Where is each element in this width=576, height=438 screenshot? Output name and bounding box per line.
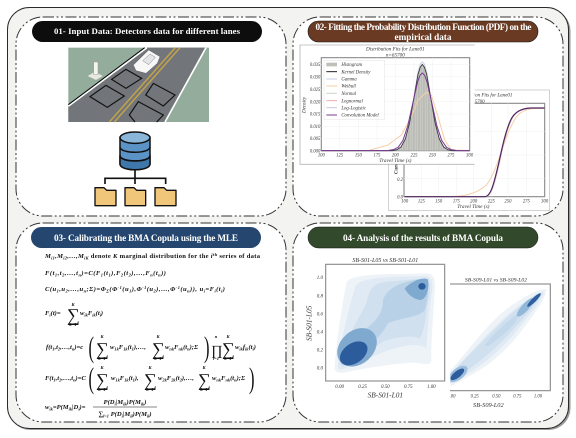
heading: input data (32, 21, 262, 42)
formula: joint distribution: F(t (45, 270, 54, 277)
formula: joint density: i=1 (213, 356, 219, 361)
formula: joint density: ,…,t (59, 344, 72, 351)
formula: joint CDF: ∑ (96, 370, 109, 390)
formula: joint distribution: ,t (57, 270, 62, 277)
formula: joint density: K (225, 334, 230, 339)
formula: joint distribution: (t (103, 270, 108, 277)
icon: folder 1 (95, 188, 116, 206)
formula: joint density: ∑ (222, 339, 235, 359)
heading: PDF fitting: 02- Fitting the Probability Distribution Function (PDF) on the (316, 22, 532, 32)
chart: cumulative distribution fits: Cumulative (394, 149, 399, 174)
formula: joint density: ),…, (133, 344, 146, 351)
formula: joint density: 2 (57, 346, 61, 352)
heading: BMA copula calibration (31, 227, 261, 248)
formula: gaussian copula: (t (216, 286, 221, 293)
formula: joint density: ∑ (96, 339, 109, 359)
icon: roadside sensor post (88, 62, 103, 80)
chart: density SB-S01-L05 vs SB-S01-L01: SB-S01-L05 vs SB-S01-L01 (352, 258, 418, 264)
chart: density SB-S01-L05 vs SB-S01-L01: 0.25 (358, 385, 368, 390)
chart: cumulative distribution fits: tion Fits for Lane01 (472, 93, 512, 98)
formula: joint distribution: n (150, 272, 153, 278)
formula: gaussian copula: i (214, 288, 216, 294)
chart: density distribution fits: 275 (448, 154, 455, 159)
icon: folder 3 (155, 188, 176, 206)
formula: marginal definition: iK (84, 256, 90, 260)
heading: copula results (308, 227, 538, 248)
chart: density distribution fits: n=65700 (386, 53, 405, 59)
formula: joint CDF: nk (216, 378, 222, 382)
formula: joint density: (t (183, 344, 187, 351)
chart: density SB-S01-L05 vs SB-S01-L01: SB-S01-L01 (368, 391, 403, 400)
histogram (397, 64, 448, 151)
heading: PDF fitting: empirical data (395, 32, 452, 42)
chart: density distribution fits: 0.010 (310, 125, 321, 130)
chart: density SB-S09-L01 vs SB-S09-L02: 0.25 (471, 394, 479, 399)
chart: density distribution fits: 0.020 (310, 100, 321, 105)
formula: joint distribution: 1 (101, 272, 103, 278)
chart: density SB-S01-L05 vs SB-S01-L01: 0.50 (381, 385, 390, 390)
chart: density SB-S09-L01 vs SB-S09-L02: SB-S09-L02 (473, 402, 504, 409)
formula: BMA marginal: ∑ (67, 305, 80, 325)
chart: cumulative distribution fits: 275 (523, 199, 530, 204)
formula: joint CDF: K (201, 365, 206, 370)
formula: BMA weights: ik (69, 406, 73, 412)
formula: joint density: n (215, 334, 218, 339)
formula: joint density: F (119, 344, 124, 351)
formula: joint CDF: n (73, 378, 76, 382)
legend (324, 60, 385, 119)
formula: joint density: )=c (73, 344, 83, 351)
formula: BMA weights: l=1 (103, 414, 109, 418)
chart: density distribution fits: Travel Time (s) (379, 157, 412, 164)
formula: BMA weights: il (147, 414, 150, 418)
chart: cumulative distribution fits: 100 (401, 199, 409, 204)
formula: joint density: ik (239, 346, 244, 352)
chart: cumulative distribution fits: 0.2 (397, 178, 404, 183)
chart: cumulative distribution fits: 150 (435, 199, 443, 204)
chart: density SB-S09-L01 vs SB-S09-L02: 0.00 (447, 394, 456, 399)
chart: cumulative distribution fits: 5700 (475, 100, 485, 105)
heading: copula results: 04- Analysis of the results of BMA Copula (343, 233, 503, 243)
formula: joint density: f(t (46, 344, 52, 351)
chart: density SB-S09-L01 vs SB-S09-L02: 0.75 (513, 394, 522, 399)
formula: BMA marginal: F (88, 310, 93, 317)
formula: marginal definition: K marginal distribution for the i (113, 253, 213, 260)
icon: car (133, 50, 160, 73)
fitted curves (321, 62, 470, 151)
formula: joint CDF: 2 (58, 378, 62, 382)
legend: Log-Logistic (340, 106, 367, 111)
formula: joint CDF: nk (225, 378, 231, 382)
formula: joint CDF: F (120, 375, 125, 382)
formula: joint distribution: ),…,F (130, 270, 150, 277)
chart: cumulative distribution fits: 175 (453, 199, 460, 204)
formula: marginal definition: denote (89, 253, 113, 260)
chart: density distribution fits: Distribution Fits for Lane01 (365, 45, 425, 52)
chart: density SB-S01-L05 vs SB-S01-L01: SB-S01-L05 (305, 305, 314, 341)
legend: Normal (340, 92, 357, 97)
formula: joint density (46, 331, 256, 364)
formula: BMA marginal: i (100, 312, 102, 318)
formula: BMA weights: ik (123, 402, 127, 406)
formula: BMA weights: ∑ (98, 411, 103, 418)
formula: gaussian copula: 1 (57, 288, 59, 294)
chart: density SB-S01-L05 vs SB-S01-L01 (301, 253, 450, 402)
formula: joint CDF: ) (249, 362, 254, 395)
chart: density SB-S01-L05 vs SB-S01-L01: 1.00 (427, 385, 436, 390)
formula: BMA marginal: K (70, 302, 75, 307)
formula: joint CDF: ∑ (144, 370, 157, 390)
formula: BMA weights: P(D (109, 411, 122, 418)
chart: density distribution fits: 0.000 (310, 149, 321, 154)
heading: input data: 01- Input Data: Detectors data for different lanes (54, 26, 241, 36)
formula: joint distribution: 2 (61, 272, 65, 278)
panel: BMA copula calibration (16, 223, 286, 422)
formula: joint CDF: ,…,t (60, 375, 73, 382)
formula: joint CDF: 1 (53, 378, 56, 382)
formula: gaussian copula: 2 (65, 288, 69, 294)
formula: joint density: k=1 (224, 356, 232, 361)
legend: Gamma (341, 78, 357, 83)
formula: gaussian copula: -1 (142, 285, 146, 290)
formula: BMA marginal: ik (84, 312, 89, 318)
chart: density SB-S01-L05 vs SB-S01-L01: 0.4 (317, 331, 324, 336)
chart: density SB-S09-L01 vs SB-S09-L02: 0.50 (492, 394, 501, 399)
formula: gaussian copula: =F (205, 286, 215, 293)
chart: density distribution fits: 0.025 (310, 88, 321, 93)
formula: joint density: k=1 (98, 356, 106, 361)
formula: joint CDF: 2k (170, 378, 176, 382)
formula: joint CDF: 1k (124, 378, 129, 382)
formula: joint density: K (99, 334, 104, 339)
formula: joint CDF: F(t (45, 375, 53, 382)
chart: cumulative distribution fits: 225 (488, 199, 495, 204)
formula: joint density: nk (178, 346, 184, 352)
formula: joint density: (t (128, 344, 132, 351)
formula: joint CDF: 2 (179, 378, 183, 382)
formula: joint CDF: ,t (55, 375, 59, 382)
formula: BMA weights: )P(M (132, 411, 148, 418)
formula: joint density: nk (169, 346, 175, 352)
formula: marginal definition: ,…,M (66, 253, 85, 260)
chart: density distribution fits: 0.015 (310, 113, 321, 118)
formula: joint CDF: k=1 (98, 387, 106, 392)
formula: joint density: ( (88, 331, 94, 364)
road detector illustration (68, 48, 209, 122)
CDF curves (405, 108, 545, 197)
chart: density distribution fits: 150 (355, 154, 362, 159)
formula: gaussian copula: i (221, 288, 223, 294)
formula: joint CDF: (t (176, 375, 180, 382)
formula: BMA marginal: F (45, 310, 49, 317)
formula: joint distribution: (t (153, 270, 158, 277)
chart: density SB-S09-L01 vs SB-S09-L02: 1.00 (534, 394, 543, 399)
formula: joint density: (t (248, 344, 253, 351)
formula: gaussian copula: i (204, 288, 206, 294)
formula: BMA weights: w (45, 404, 49, 411)
formula: gaussian copula: (u (122, 286, 129, 293)
formula: joint density: ,t (53, 344, 58, 351)
formula: gaussian copula: ,u (58, 286, 65, 293)
formula: BMA weights: i (122, 414, 124, 418)
formula: BMA weights: P(D (104, 399, 115, 406)
formula: BMA weights: =P(M (53, 404, 70, 411)
formula: BMA weights: ik (141, 402, 145, 406)
formula: BMA marginal: ik (92, 312, 96, 318)
formula: joint CDF: F (221, 375, 226, 382)
formula: joint density: );Σ (189, 344, 199, 351)
formula: joint density: K (155, 334, 160, 339)
formula: joint distribution: 1 (55, 272, 57, 278)
formula: BMA marginal: ) (100, 310, 103, 317)
formula: joint CDF: ), (134, 375, 139, 382)
formula: gaussian copula: n (84, 288, 87, 294)
formula: joint density: ik (245, 346, 249, 352)
formula: BMA marginal: w (80, 310, 84, 317)
formula: BMA weights: |D (72, 404, 79, 411)
formula: gaussian copula: 1 (129, 288, 131, 294)
formula: joint density: ) (204, 331, 209, 364)
chart: density distribution fits (300, 45, 475, 164)
formula: joint CDF: ( (88, 362, 94, 395)
formula: BMA marginal: k=1 (69, 322, 77, 327)
chart: density SB-S01-L05 vs SB-S01-L01: 1.0 (317, 276, 324, 281)
formula: joint CDF: K (147, 365, 152, 370)
formula: BMA marginal: (t (96, 310, 100, 317)
legend: Kernel Density (340, 70, 371, 75)
chart: density distribution fits: 0.030 (310, 75, 321, 80)
chart: density distribution fits: 100 (318, 154, 325, 159)
formula: gaussian copula: ),…,Φ (155, 286, 176, 293)
formula: joint CDF: k=1 (146, 387, 154, 392)
formula: joint density: ∏ (211, 344, 223, 359)
chart: density distribution fits: 0.005 (310, 137, 321, 142)
chart: cumulative distribution fits: 300 (541, 199, 549, 204)
formula: BMA weights: ) (143, 399, 146, 406)
formula: joint density: w (235, 344, 239, 351)
chart: density SB-S01-L05 vs SB-S01-L01: 0.00 (335, 385, 345, 390)
formula: marginal definition: ,M (54, 253, 64, 260)
formula: gaussian copula: ) (222, 286, 225, 293)
formula: gaussian copula: n (187, 288, 190, 294)
chart: density SB-S01-L05 vs SB-S01-L01: 0.6 (317, 313, 324, 318)
formula: joint distribution: n (158, 272, 161, 278)
formula: joint CDF: n (234, 378, 237, 382)
heading: PDF fitting (308, 21, 538, 42)
formula: joint CDF: k=1 (200, 387, 208, 392)
formula: BMA marginal: (t)= (51, 310, 61, 317)
formula: BMA weights: ik (49, 406, 54, 412)
formula: marginal definition: i2 (63, 256, 68, 260)
formula: joint CDF: 2k (161, 378, 168, 382)
formula: gaussian copula: -1 (118, 285, 122, 290)
formula: joint density: F (174, 344, 179, 351)
chart: density distribution fits: 175 (374, 154, 381, 159)
formula: joint CDF: ),…, (181, 375, 194, 382)
formula: joint distribution: n (78, 272, 81, 278)
formula: marginal definition: th (213, 252, 218, 257)
formula: marginal definition: i1 (51, 256, 55, 260)
chart: cumulative distribution fits: Travel Time (s) (457, 203, 490, 210)
formula: BMA weights: )P(M (126, 399, 142, 406)
chart: density distribution fits: Density (301, 96, 307, 114)
formula: gaussian copula: Σ (105, 288, 109, 294)
formula: joint distribution: 1 (108, 272, 111, 278)
formula: joint distribution: 2 (120, 272, 124, 278)
formula: joint density: 1 (52, 346, 54, 352)
legend: Histogram (340, 63, 363, 68)
panel: input data (16, 17, 286, 216)
formula: joint density: 1 (132, 346, 134, 352)
formula: BMA marginal (45, 302, 103, 327)
formula: joint CDF: 1k (115, 378, 121, 382)
chart: density distribution fits: 250 (429, 154, 436, 159)
formula: BMA weights: ) (148, 411, 152, 418)
formula: joint density: w (165, 344, 169, 351)
icon: database (120, 132, 150, 170)
chart: cumulative distribution fits: 200 (470, 199, 478, 204)
formula: gaussian copula: ;Σ)=Φ (86, 286, 107, 293)
formula: joint CDF: )=C (75, 375, 86, 382)
formula: joint density: n (72, 346, 75, 352)
legend: Convolution Model (341, 114, 379, 119)
legend: Weibull (341, 85, 357, 90)
formula: joint density: i (252, 346, 254, 352)
chart: density SB-S09-L01 vs SB-S09-L02: SB-S09-L01 vs SB-S09-L02 (465, 277, 527, 283)
formula: joint density: ) (253, 344, 256, 351)
formula: joint distribution: )) (160, 270, 166, 277)
formula: joint CDF: w (158, 375, 162, 382)
formula: joint CDF: K (99, 365, 104, 370)
formula: joint density: f (243, 344, 246, 351)
formula: gaussian copula: C(u (45, 286, 56, 293)
formula: joint CDF: w (111, 375, 115, 382)
icon: folder tree (95, 170, 176, 206)
legend: Lognormal (340, 99, 363, 104)
formula: BMA weights: i (78, 406, 80, 412)
formula: joint distribution: ),F (110, 270, 121, 277)
formula: gaussian copula: ),Φ (131, 286, 143, 293)
chart: density SB-S01-L05 vs SB-S01-L01: 0.0 (317, 367, 324, 372)
chart: cumulative distribution fits: 250 (505, 199, 512, 204)
chart: density distribution fits: 0.035 (310, 63, 321, 68)
formula: gaussian copula: (u (147, 286, 153, 293)
formula block (44, 252, 261, 418)
formula: BMA weights: |M (116, 399, 124, 406)
formula: joint CDF: );Σ (236, 375, 246, 382)
formula: joint density: 1k (114, 346, 120, 352)
formula: joint density: 1k (123, 346, 128, 352)
formula: joint CDF: 1 (133, 378, 135, 382)
formula: marginal definition: M (45, 253, 51, 260)
formula: joint CDF: F (167, 375, 172, 382)
chart: density SB-S01-L05 vs SB-S01-L01: 0.8 (317, 294, 324, 299)
formula: BMA weights (45, 399, 157, 418)
formula: joint distribution: )=C(F (80, 270, 101, 277)
chart: density distribution fits: 300 (466, 154, 474, 159)
formula: BMA weights: il (130, 414, 133, 418)
formula: joint CDF: (t (230, 375, 234, 382)
chart: density distribution fits: 225 (411, 154, 418, 159)
formula: marginal definition: series of data (217, 253, 261, 260)
formula: BMA weights: i (115, 402, 117, 406)
chart: cumulative distribution fits: 0.0 (397, 196, 404, 201)
formula: gaussian copula: -1 (176, 285, 180, 290)
formula: gaussian copula: (Φ (109, 286, 118, 293)
formula: BMA weights: )= (79, 404, 86, 411)
heading: BMA copula calibration: 03- Calibrating the BMA Copula using the MLE (54, 233, 238, 243)
chart: density distribution fits: 200 (392, 154, 399, 159)
panel: copula results (293, 223, 563, 422)
formula: joint CDF (45, 362, 254, 395)
formula: joint CDF: (t (129, 375, 133, 382)
formula: gaussian copula: 2 (153, 288, 157, 294)
formula: joint distribution: ,…,t (64, 270, 78, 277)
formula: joint density: w (110, 344, 114, 351)
chart: density SB-S09-L01 vs SB-S09-L02 (450, 278, 551, 407)
formula: joint CDF: w (212, 375, 216, 382)
formula: BMA marginal: i (49, 312, 51, 318)
panel: PDF fitting (293, 17, 563, 216)
formula: BMA weights: |M (123, 411, 131, 418)
formula: gaussian copula: )), u (189, 286, 204, 293)
formula: joint CDF: ∑ (198, 370, 211, 390)
formula: joint density: n (187, 346, 190, 352)
chart: cumulative distribution fits (389, 90, 550, 211)
formula: joint density: k=1 (154, 356, 162, 361)
icon: folder 2 (125, 188, 146, 206)
formula: joint distribution: 2 (128, 272, 132, 278)
chart: density distribution fits: 125 (336, 154, 344, 159)
chart: density SB-S01-L05 vs SB-S01-L01: 0.75 (404, 385, 413, 390)
formula: gaussian copula: ,…,u (67, 286, 83, 293)
formula: gaussian copula: (u (180, 286, 187, 293)
chart: density SB-S01-L05 vs SB-S01-L01: 0.2 (317, 349, 324, 354)
chart: cumulative distribution fits: 125 (418, 199, 425, 204)
formula: joint density: ∑ (152, 339, 165, 359)
formula: joint distribution: (t (124, 270, 128, 277)
